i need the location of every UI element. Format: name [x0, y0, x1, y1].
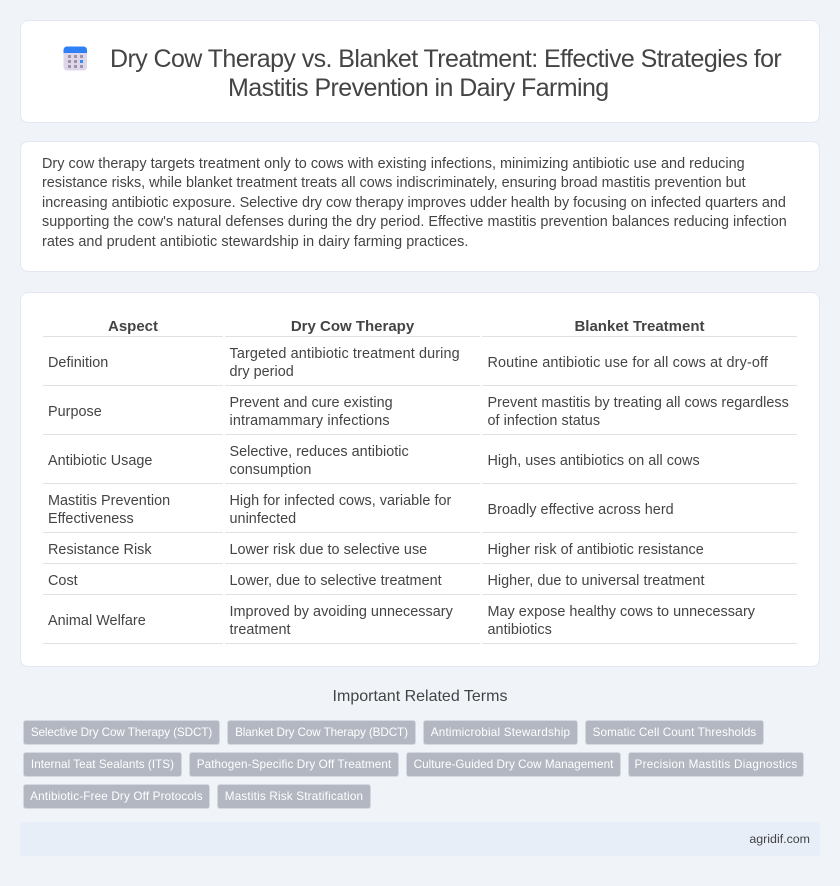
row: mastitis prevention effectiveness: [48, 493, 170, 527]
animal welfare: blanket treatment: May expose healthy cows to unnecessary: [488, 604, 755, 620]
tag: Internal Teat Sealants (ITS): [31, 758, 174, 770]
row: definition: Definition: [48, 355, 108, 371]
tag: Antibiotic-Free Dry Off Protocols: [30, 790, 203, 802]
effectiveness: dry cow therapy: [230, 493, 452, 527]
tag: [189, 752, 399, 776]
antibiotic usage: dry cow therapy: Selective, reduces antibiotic: [230, 444, 409, 460]
tag: [217, 784, 371, 808]
animal welfare: dry cow therapy: Improved by avoiding unnecessary: [230, 604, 453, 620]
icon: calendar: [64, 46, 87, 70]
purpose: dry cow therapy: intramammary infections: [230, 413, 390, 429]
row: cost: Cost: [48, 573, 78, 589]
row: antibiotic usage: Antibiotic Usage: [48, 453, 152, 469]
table panel: [20, 292, 820, 667]
tag: Blanket Dry Cow Therapy (BDCT): [235, 726, 408, 738]
effectiveness: dry cow therapy: uninfected: [230, 511, 296, 527]
tag: [227, 720, 416, 744]
header panel: [20, 20, 820, 123]
tag: Culture-Guided Dry Cow Management: [414, 758, 613, 770]
purpose: blanket treatment: [488, 395, 789, 429]
title: Mastitis Prevention in Dairy Farming: [228, 74, 609, 102]
purpose: dry cow therapy: Prevent and cure existing: [230, 395, 393, 411]
header: aspect: Aspect: [108, 318, 158, 334]
tag: Selective Dry Cow Therapy (SDCT): [31, 726, 212, 738]
resistance risk: blanket treatment: Higher risk of antibiotic resistance: [488, 542, 704, 558]
title: [110, 45, 782, 102]
antibiotic usage: blanket treatment: High, uses antibiotics on all cows: [488, 453, 700, 469]
related terms tags: [23, 720, 804, 809]
antibiotic usage: dry cow therapy: [230, 444, 409, 478]
tag: Somatic Cell Count Thresholds: [593, 726, 756, 738]
intro text: [42, 156, 787, 250]
tag: [23, 784, 210, 808]
definition: dry cow therapy: dry period: [230, 364, 294, 380]
tag: [628, 752, 804, 776]
row: animal welfare: Animal Welfare: [48, 613, 146, 629]
title: Dry Cow Therapy vs. Blanket Treatment: Effective Strategies for: [110, 45, 781, 73]
definition: blanket treatment: Routine antibiotic use for all cows at dry-off: [488, 355, 768, 371]
intro panel: [20, 141, 820, 272]
effectiveness: dry cow therapy: High for infected cows, variable for: [230, 493, 451, 509]
tag: Antimicrobial Stewardship: [431, 726, 570, 738]
tag: Precision Mastitis Diagnostics: [634, 758, 798, 770]
comparison table: [43, 318, 797, 644]
purpose: dry cow therapy: [230, 395, 393, 429]
footer bar: [20, 822, 820, 856]
purpose: blanket treatment: of infection status: [488, 413, 600, 429]
tag: Pathogen-Specific Dry Off Treatment: [197, 758, 391, 770]
resistance risk: dry cow therapy: Lower risk due to selective use: [230, 542, 427, 558]
intro text: resistance risks, while blanket treatment treats all cows indiscriminately, ensuring broad mastitis prevention but: [42, 175, 746, 191]
intro text: rates and prudent antibiotic stewardship in dairy farming practices.: [42, 234, 468, 250]
related terms heading: Important Related Terms: [333, 688, 507, 705]
row: resistance risk: Resistance Risk: [48, 542, 152, 558]
tag: [406, 752, 621, 776]
effectiveness: blanket treatment: Broadly effective across herd: [488, 502, 674, 518]
definition: dry cow therapy: Targeted antibiotic treatment during: [230, 346, 460, 362]
tag: [585, 720, 764, 744]
tag: [23, 752, 182, 776]
tag: [23, 720, 220, 744]
header: dry cow therapy: Dry Cow Therapy: [291, 318, 414, 334]
animal welfare: dry cow therapy: [230, 604, 453, 638]
row: purpose: Purpose: [48, 404, 102, 420]
intro text: increasing antibiotic exposure. Selective dry cow therapy improves udder health by focusing on infected quarters and: [42, 195, 786, 211]
purpose: blanket treatment: Prevent mastitis by treating all cows regardless: [488, 395, 789, 411]
header: blanket treatment: Blanket Treatment: [574, 318, 705, 334]
antibiotic usage: dry cow therapy: consumption: [230, 462, 311, 478]
row: mastitis prevention effectiveness: Mastitis Prevention: [48, 493, 170, 509]
cost: blanket treatment: Higher, due to universal treatment: [488, 573, 704, 589]
cost: dry cow therapy: Lower, due to selective treatment: [230, 573, 442, 589]
intro text: Dry cow therapy targets treatment only to cows with existing infections, minimizing antibiotic use and reducing: [42, 156, 745, 172]
animal welfare: blanket treatment: [488, 604, 755, 638]
tag: Mastitis Risk Stratification: [225, 790, 363, 802]
definition: dry cow therapy: [230, 346, 460, 380]
row: mastitis prevention effectiveness: Effectiveness: [48, 511, 134, 527]
animal welfare: dry cow therapy: treatment: [230, 622, 291, 638]
animal welfare: blanket treatment: antibiotics: [488, 622, 552, 638]
tag: [423, 720, 578, 744]
footer source: agridif.com: [749, 832, 810, 846]
intro text: supporting the cow's natural defenses during the dry period. Effective mastitis prevention balances reducing infection: [42, 214, 787, 230]
